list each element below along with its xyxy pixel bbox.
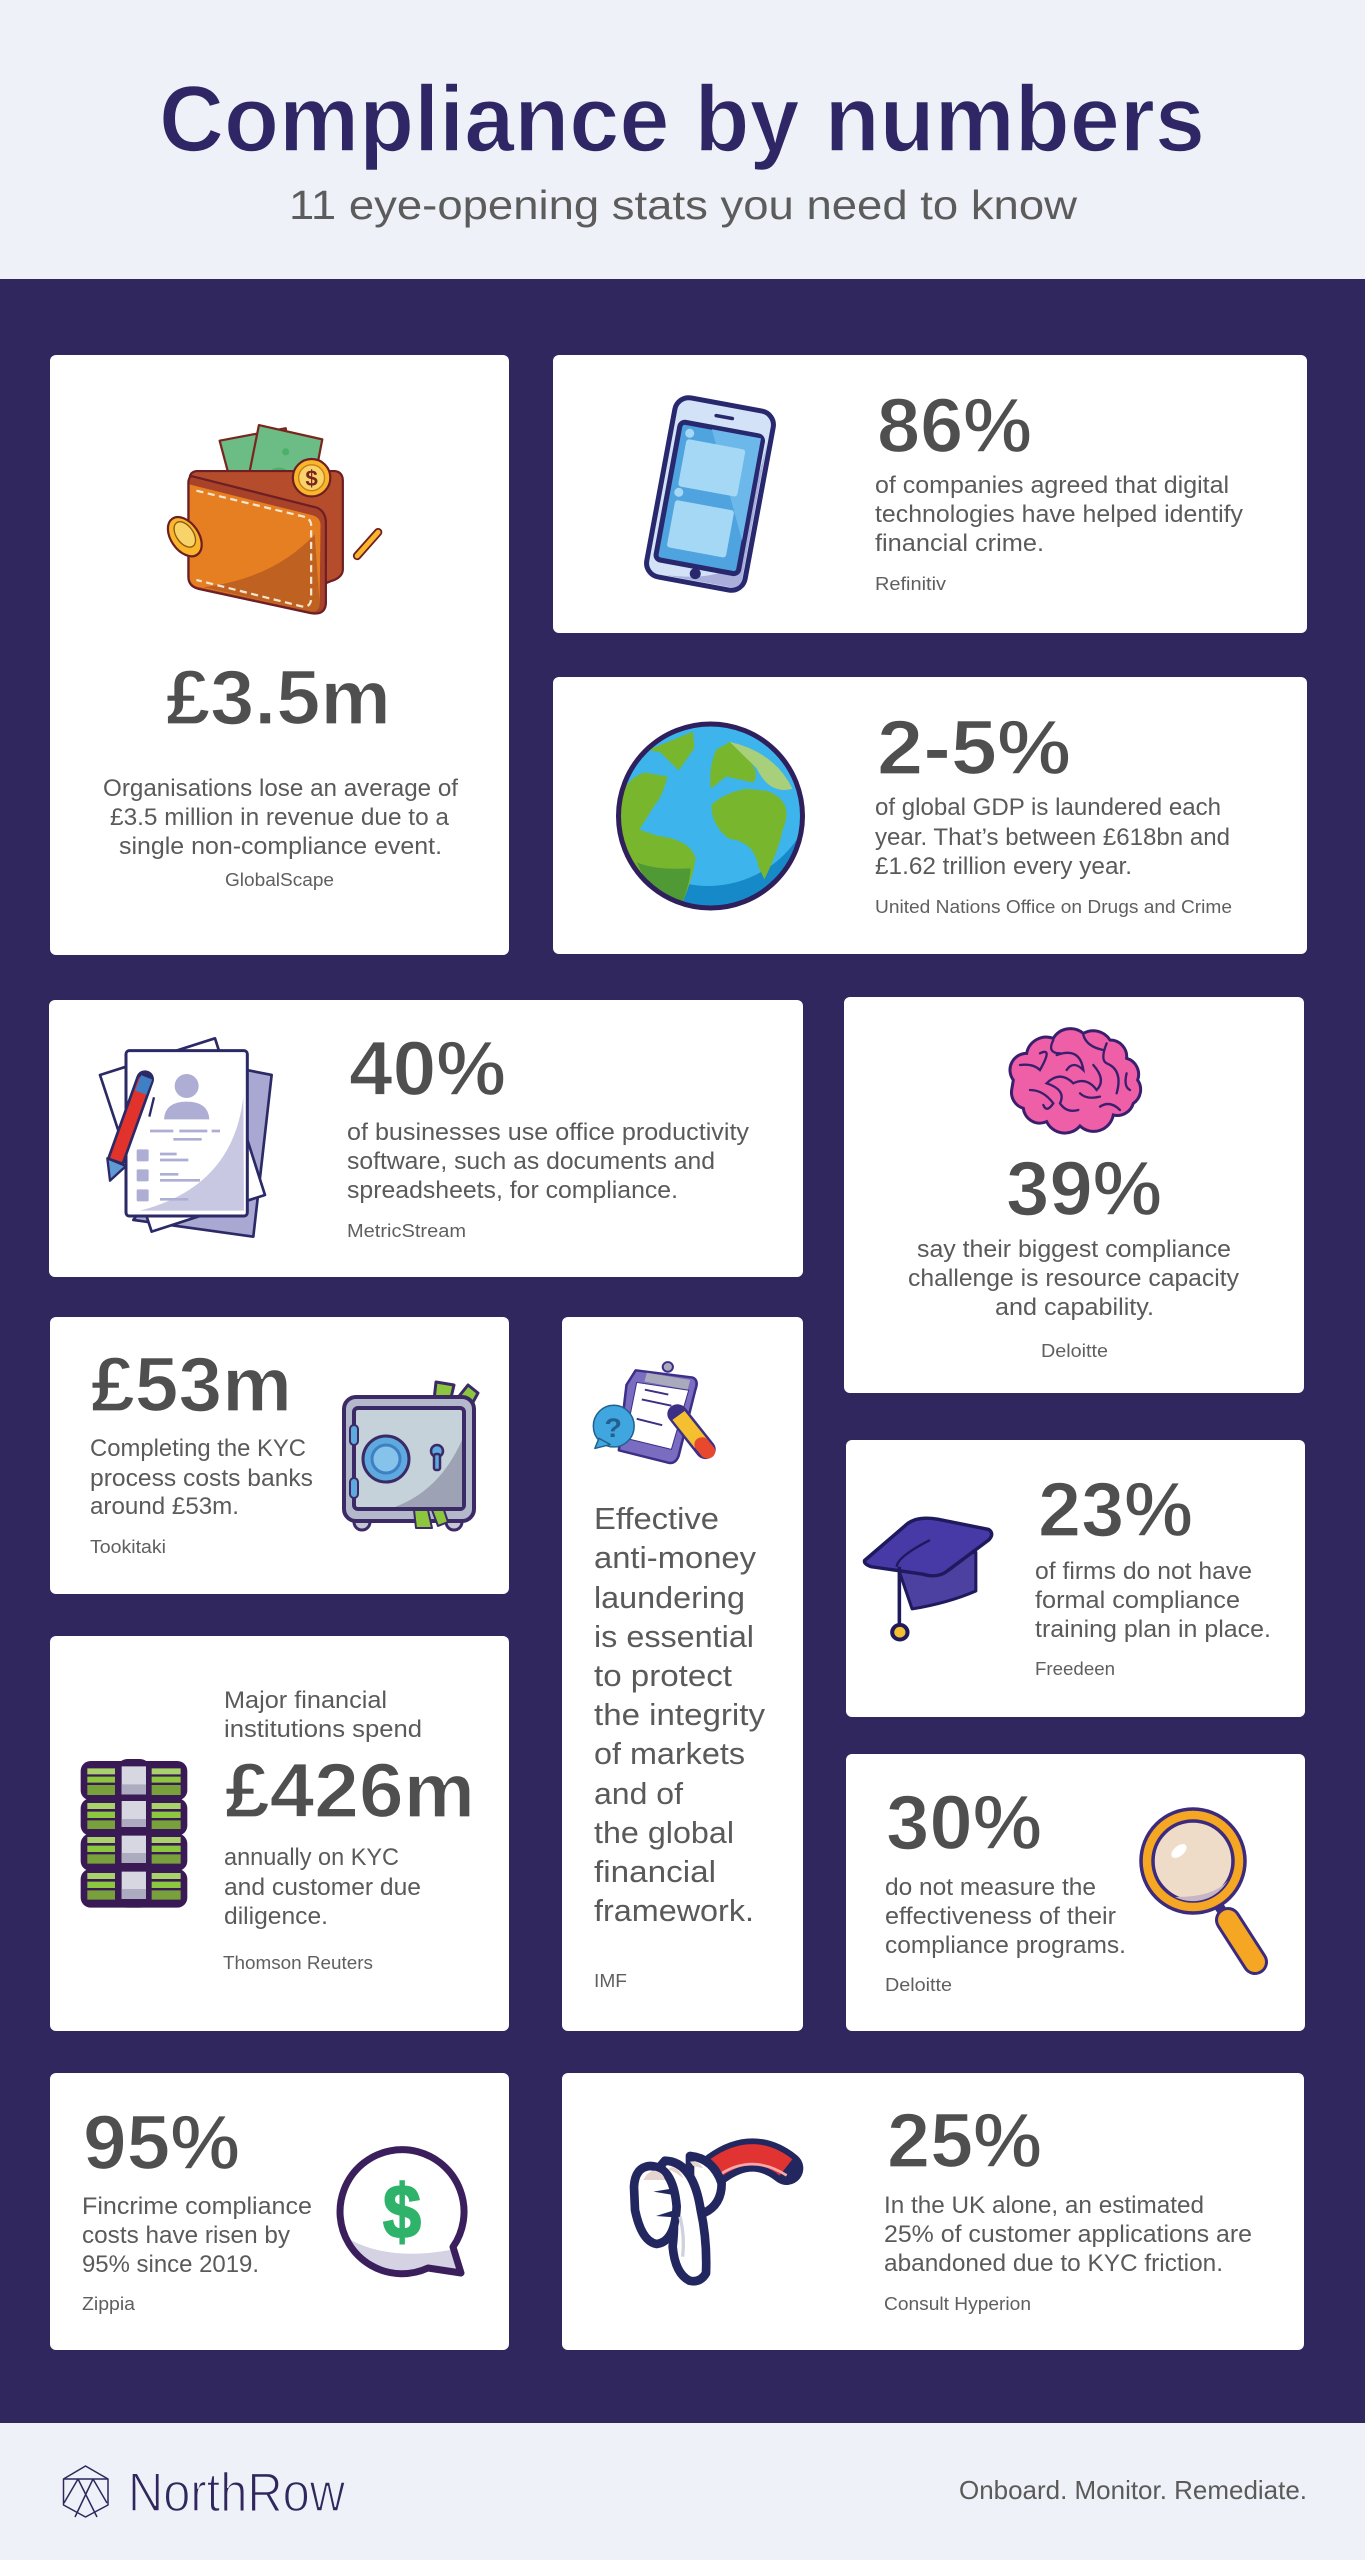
panel: 23% — [846, 1440, 1305, 1717]
description: 95% since 2019. — [82, 2251, 259, 2278]
description — [884, 2192, 1252, 2277]
source: Deloitte — [1041, 1341, 1108, 1361]
icon: speech bubble with dollar — [340, 2150, 464, 2274]
description: formal compliance — [1035, 1587, 1240, 1614]
source: Tookitaki — [90, 1537, 166, 1557]
stat: £53m: £53m — [91, 1342, 292, 1428]
source: Consult Hyperion — [884, 2294, 1031, 2314]
panel: 40% — [49, 1000, 803, 1277]
description — [103, 775, 458, 860]
description: single non-compliance event. — [119, 833, 442, 860]
description: costs have risen by — [82, 2222, 290, 2249]
title: Compliance by numbers — [159, 66, 1205, 171]
lead-in text: Major financial — [224, 1687, 387, 1714]
description — [82, 2193, 312, 2278]
description: year. That’s between £618bn and — [875, 824, 1230, 851]
stat: 40%: 40% — [349, 1026, 506, 1112]
description: In the UK alone, an estimated — [884, 2192, 1204, 2219]
description — [224, 1844, 421, 1930]
description: abandoned due to KYC friction. — [884, 2250, 1223, 2277]
quote text: financial — [594, 1854, 716, 1889]
header band — [0, 0, 1365, 279]
quote text: and of — [594, 1776, 683, 1811]
source: MetricStream — [347, 1221, 466, 1241]
description: of businesses use office productivity — [347, 1119, 749, 1146]
description: process costs banks — [90, 1465, 313, 1492]
lead-in text — [224, 1687, 422, 1743]
description: and customer due — [224, 1874, 421, 1901]
stat: 23%: 23% — [1038, 1467, 1193, 1553]
quote text: the global — [594, 1815, 734, 1850]
icon: safe with cash — [344, 1382, 478, 1530]
panel: 95% — [50, 2073, 509, 2350]
description: challenge is resource capacity — [908, 1265, 1239, 1292]
description: around £53m. — [90, 1493, 239, 1520]
icon: NorthRow logo — [64, 2466, 108, 2517]
description: training plan in place. — [1035, 1616, 1271, 1643]
panel: £426m — [50, 1636, 509, 2031]
icon: smartphone — [644, 395, 776, 593]
panel: 30% — [846, 1754, 1305, 2031]
description: effectiveness of their — [885, 1903, 1116, 1930]
description: £1.62 trillion every year. — [875, 853, 1132, 880]
panel: 86% — [553, 355, 1307, 633]
icon: globe — [616, 722, 805, 910]
stat: 30%: 30% — [886, 1780, 1042, 1866]
icon: clipboard, pencil and question bubble: ? — [605, 1412, 622, 1443]
source: Freedeen — [1035, 1659, 1115, 1679]
description: annually on KYC — [224, 1844, 399, 1871]
tagline: Onboard. Monitor. Remediate. — [959, 2475, 1307, 2505]
quote text: anti-money — [594, 1540, 757, 1575]
panel: 25% — [562, 2073, 1304, 2350]
icon: wallet with money — [161, 425, 378, 614]
description: technologies have helped identify — [875, 501, 1243, 528]
quote text: of markets — [594, 1736, 745, 1771]
description — [347, 1119, 749, 1204]
subtitle: 11 eye-opening stats you need to know — [289, 182, 1077, 228]
source: Thomson Reuters — [223, 1953, 373, 1973]
description: Completing the KYC — [90, 1435, 306, 1462]
description: software, such as documents and — [347, 1148, 715, 1175]
description: do not measure the — [885, 1874, 1096, 1901]
footer band — [0, 2423, 1365, 2560]
source: IMF — [594, 1971, 627, 1991]
stat: 2-5%: 2-5% — [877, 705, 1071, 791]
source: Zippia — [82, 2294, 136, 2314]
description: of global GDP is laundered each — [875, 794, 1221, 821]
description: spreadsheets, for compliance. — [347, 1177, 678, 1204]
quote text — [594, 1501, 766, 1928]
stat: 95%: 95% — [83, 2100, 240, 2186]
panel: 2-5% — [553, 670, 1307, 954]
source: Deloitte — [885, 1975, 952, 1995]
icon: clipboard, pencil and question bubble — [593, 1362, 708, 1463]
brand name: NorthRow — [128, 2461, 345, 2523]
panel: £3.5m — [50, 355, 509, 955]
description: diligence. — [224, 1903, 328, 1930]
source: GlobalScape — [225, 870, 334, 890]
description: and capability. — [995, 1294, 1154, 1321]
stat: 39%: 39% — [1006, 1146, 1162, 1232]
description — [90, 1435, 313, 1520]
stat: 86%: 86% — [877, 383, 1032, 469]
quote text: the integrity — [594, 1697, 766, 1732]
quote text: laundering — [594, 1580, 745, 1615]
quote text: Effective — [594, 1501, 719, 1536]
panel: IMF quote — [562, 1317, 803, 2031]
icon: thumbs down — [634, 2154, 787, 2281]
icon: wallet with money: $ — [305, 466, 318, 491]
quote text: to protect — [594, 1658, 732, 1693]
description — [885, 1874, 1126, 1959]
panel: 39% — [844, 997, 1304, 1393]
panel: £53m — [50, 1317, 509, 1594]
description — [1035, 1558, 1271, 1643]
stat: 25%: 25% — [887, 2098, 1042, 2184]
description — [875, 794, 1230, 880]
description: Fincrime compliance — [82, 2193, 312, 2220]
stat: £426m: £426m — [225, 1748, 475, 1834]
icon: documents and pen — [100, 1038, 272, 1237]
description: of firms do not have — [1035, 1558, 1252, 1585]
lead-in text: institutions spend — [224, 1716, 422, 1743]
icon: magnifying glass — [1141, 1809, 1255, 1962]
source: Refinitiv — [875, 574, 946, 594]
quote text: is essential — [594, 1619, 754, 1654]
description: of companies agreed that digital — [875, 472, 1229, 499]
icon: graduation cap — [865, 1518, 992, 1640]
description: 25% of customer applications are — [884, 2221, 1252, 2248]
description: say their biggest compliance — [917, 1236, 1231, 1263]
icon: brain — [1010, 1029, 1141, 1133]
source: United Nations Office on Drugs and Crime — [875, 897, 1232, 917]
description — [908, 1236, 1239, 1321]
icon: cash bundles — [81, 1759, 187, 1908]
description: Organisations lose an average of — [103, 775, 458, 802]
description: £3.5 million in revenue due to a — [110, 804, 450, 831]
description: compliance programs. — [885, 1932, 1126, 1959]
description: financial crime. — [875, 530, 1044, 557]
quote text: framework. — [594, 1893, 754, 1928]
icon: speech bubble with dollar: $ — [383, 2170, 421, 2255]
description — [875, 472, 1243, 557]
stat: £3.5m: £3.5m — [166, 655, 391, 741]
